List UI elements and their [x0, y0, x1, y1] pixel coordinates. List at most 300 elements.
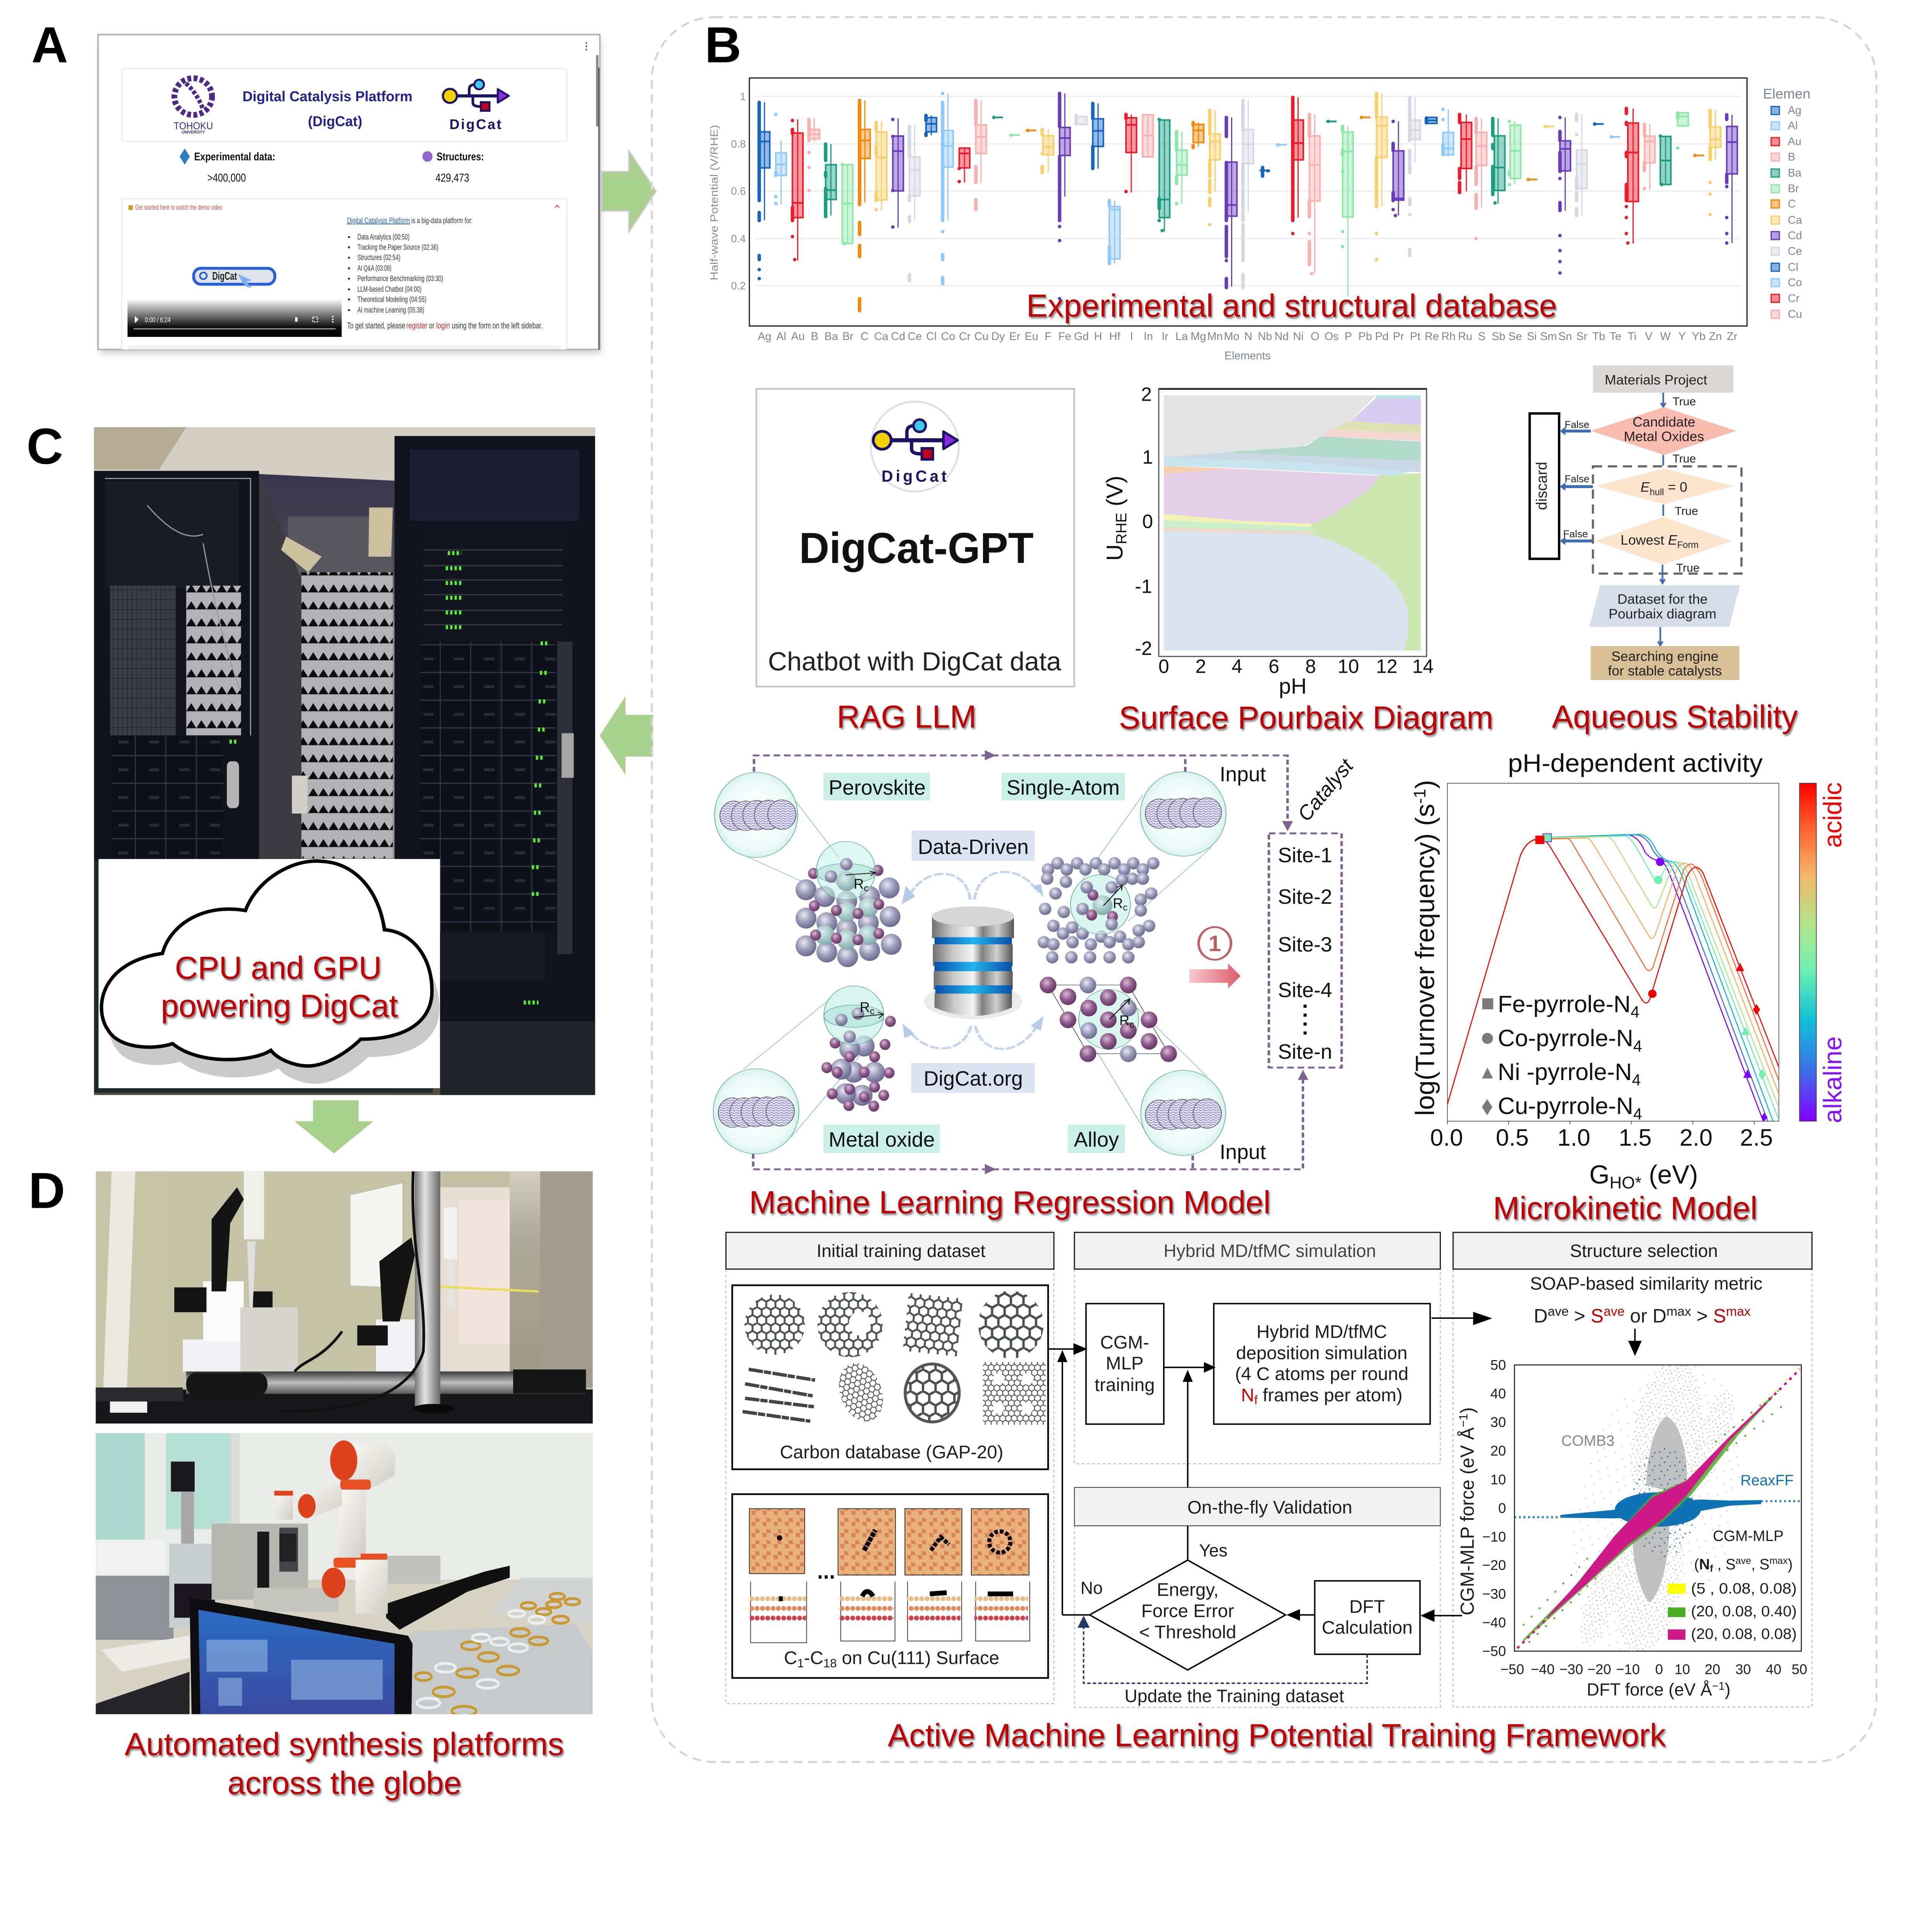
axes text: )	[1410, 780, 1440, 789]
x axis labels: Cu	[975, 330, 988, 343]
axes text	[1410, 780, 1847, 1192]
statistics: structures: Structures:	[437, 151, 484, 163]
x axis labels: Co	[941, 330, 955, 343]
chart: parity scatter plot	[1457, 1344, 1807, 1699]
legend: Cr	[1788, 292, 1800, 304]
axis labels: 2	[1141, 383, 1152, 405]
x axis labels: Zr	[1727, 330, 1737, 343]
x axis labels: Gd	[1074, 330, 1089, 343]
parallelogram: dataset: Dataset for the	[1617, 592, 1708, 607]
icon: DigCat logo badge: DigCat	[881, 467, 947, 485]
axes text: acidic	[1819, 782, 1847, 848]
labels: Site-4	[1278, 979, 1332, 1002]
flowchart: aqueous stability	[1530, 366, 1742, 680]
flowchart: aqueous stability: True	[1675, 505, 1698, 518]
legend: Ca	[1788, 214, 1802, 226]
legend: Co	[1788, 277, 1802, 289]
workflow labels: Update the Training dataset	[1124, 1686, 1344, 1706]
labels: Catalyst	[1293, 754, 1358, 826]
x axis labels: Rh	[1441, 330, 1456, 343]
feature list text: login	[436, 321, 450, 330]
annotations and legend: ave	[1736, 1556, 1751, 1566]
axis labels	[1102, 383, 1434, 698]
x axis labels: Ce	[908, 330, 922, 343]
box: DFT calculation: Calculation	[1322, 1617, 1413, 1638]
x axis labels: Au	[791, 330, 805, 343]
chart: surface Pourbaix diagram	[1102, 383, 1434, 698]
tick labels: CGM-MLP force (eV Å	[1457, 1427, 1478, 1616]
text: SOAP similarity metric: max	[1726, 1304, 1751, 1319]
Rc labels: R	[854, 876, 864, 892]
x axis labels: I	[1130, 330, 1133, 343]
text: SOAP similarity metric: >	[1569, 1305, 1591, 1327]
tick labels: )	[1725, 1680, 1731, 1699]
annotations and legend: , S	[1713, 1556, 1736, 1573]
feature list text: Digital Catalysis Platform	[347, 216, 410, 225]
statistics: experimental data	[180, 148, 275, 184]
axis labels: -2	[1135, 638, 1152, 659]
callout cloud: powering DigCat	[161, 988, 398, 1024]
tick labels: −1	[1456, 1413, 1470, 1427]
header: structure selection: Structure selection	[1570, 1241, 1718, 1261]
green and magenta diagonal	[1517, 1365, 1801, 1648]
arrow: from C to D	[294, 1100, 373, 1153]
legend text: 4	[1633, 1037, 1642, 1055]
axis labels: 6	[1269, 655, 1279, 677]
axis labels: 10	[1338, 655, 1359, 677]
Rc labels: c	[864, 883, 869, 893]
flowchart: aqueous stability: True	[1672, 452, 1696, 465]
labels: Data-Driven	[918, 835, 1029, 859]
x axis labels	[758, 330, 1737, 362]
box: C1-C18 on Cu(111): C	[784, 1648, 797, 1668]
tick labels: −30	[1560, 1662, 1583, 1677]
feature list text: using the form on the left sidebar.	[452, 321, 543, 330]
photo: servers	[94, 427, 595, 1095]
demo video card: DigCat	[212, 270, 237, 282]
icon: Tohoku University crest: TOHOKU	[173, 120, 213, 131]
tick labels	[1457, 1357, 1807, 1699]
panel label C: C	[27, 418, 63, 474]
tick labels: −20	[1587, 1662, 1611, 1677]
lens connector lines	[743, 779, 1211, 1137]
legend text: 4	[1633, 1105, 1642, 1123]
tick labels: −20	[1482, 1557, 1506, 1573]
legend: Ba	[1788, 167, 1801, 179]
text: SOAP similarity metric: >	[1691, 1305, 1713, 1327]
diamond: lowest EForm: Form	[1677, 540, 1699, 550]
caption: Automated synthesis platforms	[124, 1726, 564, 1762]
tick labels: 0	[1498, 1500, 1506, 1516]
feature list text: is a big-data platform for:	[411, 216, 473, 225]
lens: catalyst fingerprints	[713, 772, 1226, 1155]
x axis labels: Sr	[1576, 330, 1588, 343]
axes text: log(Turnover frequency) (s	[1410, 804, 1440, 1116]
tick labels: DFT force (eV Å	[1587, 1680, 1712, 1699]
Rc labels: R	[860, 999, 870, 1015]
x axis labels: In	[1144, 330, 1153, 343]
axis labels: RHE	[1113, 513, 1130, 544]
tick labels: 0	[1655, 1662, 1663, 1677]
tick labels: −10	[1616, 1662, 1640, 1677]
callout cloud	[99, 859, 440, 1088]
box: C1-C18 on Cu(111): -C	[804, 1648, 823, 1668]
legend text: 4	[1631, 1003, 1639, 1021]
y axis labels: 0.4	[731, 233, 746, 245]
Rc labels: c	[1129, 1019, 1134, 1030]
box: searching engine	[1591, 646, 1739, 680]
tick labels: −50	[1482, 1643, 1506, 1659]
x axis labels: Fe	[1058, 330, 1071, 343]
x axis labels: Hf	[1109, 330, 1121, 343]
curves	[1447, 834, 1779, 1121]
demo video card: 0:00 / 6:24	[145, 316, 170, 324]
box: Hybrid MD/tfMC deposition: N	[1241, 1385, 1254, 1405]
tick labels: 10	[1490, 1471, 1506, 1487]
Rc labels: c	[1123, 902, 1128, 913]
x axis labels: Ni	[1293, 330, 1304, 343]
feature list text: or	[429, 321, 435, 330]
y axis labels: 0.2	[731, 280, 746, 292]
text: SOAP similarity metric: max	[1667, 1304, 1691, 1319]
box: C1-C18 on Cu(111): 1	[797, 1656, 804, 1670]
statistics: experimental data: >400,000	[207, 172, 246, 184]
annotations and legend: (5 , 0.08, 0.08)	[1691, 1580, 1797, 1597]
structure: perovskite	[796, 842, 901, 967]
box: C1-C18 on Cu(111): on Cu(111) Surface	[837, 1648, 999, 1668]
diamond: candidate metal oxides: Metal Oxides	[1624, 429, 1704, 444]
box: DFT calculation: DFT	[1349, 1597, 1385, 1617]
heading: Surface Pourbaix Diagram: Surface Pourbaix Diagram	[1119, 700, 1493, 736]
structure: alloy	[1040, 977, 1177, 1062]
feature list text: Performance Benchmarking (03:30)	[357, 275, 443, 283]
axes text: 1.0	[1558, 1124, 1590, 1151]
box: discard: discard	[1534, 462, 1550, 510]
photo: robot arm with catalyst plates	[96, 1433, 593, 1716]
box: discard	[1530, 413, 1559, 559]
feature list text: To get started, please	[347, 321, 405, 330]
panel: machine learning regression model: 1	[1209, 931, 1221, 956]
y axis labels	[708, 90, 746, 292]
chart title: pH-dependent activity	[1508, 749, 1763, 778]
false arrows: False	[1563, 528, 1588, 540]
box: Hybrid MD/tfMC deposition: deposition simulation	[1236, 1343, 1407, 1364]
feature list text: Data Analytics (00:50)	[357, 233, 410, 242]
panel B dashed outline	[652, 17, 1876, 1762]
statistics: experimental data: Experimental data:	[194, 151, 275, 163]
axes text: 2.5	[1740, 1124, 1773, 1151]
icon: DigCat logo: DigCat	[449, 116, 502, 132]
arrow: from B to C	[600, 696, 653, 775]
green LEDs	[230, 553, 548, 1003]
annotations and legend: max	[1769, 1556, 1788, 1566]
x axis labels: Mg	[1190, 330, 1206, 343]
legend: Au	[1788, 136, 1801, 148]
heading: RAG LLM: RAG LLM	[837, 699, 976, 735]
x axis labels: P	[1345, 330, 1352, 343]
x axis labels: Se	[1509, 330, 1522, 343]
header: on-the-fly validation	[1075, 1487, 1440, 1526]
legend: C	[1788, 198, 1796, 210]
chart: half-wave potential box plot	[708, 78, 1821, 362]
feature list text: Tracking the Paper Source (02:36)	[357, 243, 438, 252]
x axis labels: V	[1645, 330, 1653, 343]
axes text: 1.5	[1619, 1124, 1651, 1151]
header: initial training dataset	[726, 1232, 1054, 1269]
tick labels: −40	[1482, 1614, 1506, 1630]
Rc labels	[854, 876, 1134, 1030]
labels: Site-2	[1278, 885, 1332, 908]
x axis labels: Y	[1679, 330, 1686, 343]
tick labels: −50	[1500, 1662, 1524, 1677]
text: SOAP similarity metric: D	[1534, 1305, 1548, 1327]
box: DFT calculation	[1315, 1581, 1420, 1654]
heading: DigCat-GPT: DigCat-GPT	[799, 524, 1034, 572]
feature list text: Theoretical Modeling (04:55)	[357, 295, 427, 304]
legend: Elements	[1763, 86, 1821, 102]
box: CGM-MLP training: CGM-	[1100, 1332, 1149, 1353]
legend text: Co-pyrrole-N	[1498, 1025, 1633, 1051]
x axis labels: Al	[776, 330, 786, 343]
axes text: 2.0	[1680, 1124, 1713, 1151]
callout cloud: CPU and GPU	[175, 950, 382, 986]
gray COMB3 cloud	[1544, 1344, 1772, 1672]
x axis labels: W	[1660, 330, 1671, 343]
legend: Cd	[1788, 230, 1802, 242]
x axis labels: Ir	[1162, 330, 1168, 343]
x axis labels: Ag	[758, 330, 771, 343]
text: SOAP similarity metric: ave	[1548, 1304, 1569, 1319]
caption: across the globe	[228, 1765, 461, 1801]
statistics: structures	[422, 151, 484, 184]
tick labels: )	[1457, 1407, 1478, 1413]
axis labels: 4	[1231, 655, 1242, 677]
axes text: (eV)	[1641, 1160, 1698, 1189]
labels: DigCat.org	[923, 1067, 1023, 1090]
x axis labels: Pd	[1375, 330, 1389, 343]
x axis labels: Ca	[874, 330, 888, 343]
x axis labels: Nb	[1258, 330, 1272, 343]
box: carbon database	[732, 1285, 1048, 1469]
tick labels: 50	[1792, 1662, 1807, 1677]
tick labels: −40	[1531, 1662, 1554, 1677]
text: SOAP similarity metric: ave	[1604, 1304, 1625, 1319]
x axis labels: Eu	[1025, 330, 1038, 343]
feature list text: register	[406, 321, 428, 330]
y axis labels: Half-wave Potential (V/RHE)	[708, 125, 720, 281]
box: carbon database: Carbon database (GAP-20)	[780, 1442, 1003, 1463]
x axis labels: Cr	[959, 330, 971, 343]
axis labels: -1	[1135, 575, 1152, 597]
x axis labels: Pb	[1359, 330, 1372, 343]
x axis labels: Si	[1527, 330, 1537, 343]
box: Hybrid MD/tfMC deposition	[1214, 1304, 1430, 1424]
x axis labels: Te	[1609, 330, 1621, 343]
axis labels: (V)	[1102, 476, 1128, 513]
legend text: Ni -pyrrole-N	[1498, 1059, 1632, 1085]
structure: single atom	[1037, 857, 1160, 963]
diamond: candidate metal oxides	[1591, 407, 1736, 455]
title: Digital Catalysis Platform	[243, 88, 413, 104]
labels: Input	[1219, 1140, 1266, 1163]
panel C: server rack photo with callout	[94, 427, 595, 1095]
annotations and legend: COMB3	[1561, 1432, 1614, 1449]
diamond: error threshold: Force Error	[1141, 1601, 1234, 1621]
text: SOAP similarity metric: or D	[1625, 1305, 1667, 1327]
x axis labels: Mn	[1207, 330, 1223, 343]
x axis labels: Sm	[1540, 330, 1557, 343]
legend: Cl	[1788, 261, 1798, 274]
workflow arrows	[1049, 1312, 1642, 1683]
tick labels: −10	[1482, 1529, 1506, 1544]
annotations and legend: , S	[1751, 1556, 1769, 1573]
x axis labels: Zn	[1709, 330, 1722, 343]
icon: Tohoku University crest: UNIVERSITY	[182, 130, 205, 135]
heading: Machine Learning Regression Model: Machine Learning Regression Model	[749, 1185, 1270, 1220]
x axis labels: Elements	[1225, 350, 1271, 362]
tick labels: 30	[1735, 1662, 1751, 1677]
legend text	[1498, 991, 1642, 1123]
title	[243, 88, 413, 129]
title: (DigCat)	[308, 113, 362, 129]
axes text: 0.5	[1496, 1124, 1529, 1151]
feature list text	[347, 216, 543, 330]
parallelogram: dataset	[1589, 585, 1740, 627]
legend: Al	[1788, 119, 1798, 132]
tick labels: −1	[1712, 1680, 1725, 1692]
x axis labels: Ba	[825, 330, 838, 343]
text: SOAP similarity metric: S	[1713, 1305, 1726, 1327]
dashed box: filters	[1593, 466, 1742, 573]
axis labels: 0	[1142, 510, 1153, 532]
Rc labels: c	[870, 1006, 874, 1017]
panel: active ML potential workflow	[726, 1232, 1812, 1708]
caption: Chatbot with DigCat data	[768, 647, 1061, 676]
x axis labels: Nd	[1274, 330, 1289, 343]
false arrows: False	[1565, 418, 1589, 430]
labels	[828, 754, 1358, 1163]
labels: Site-3	[1278, 933, 1332, 956]
x axis labels: Cl	[926, 330, 937, 343]
diamond: Ehull = 0: E	[1641, 480, 1650, 495]
axis labels: U	[1102, 544, 1128, 561]
annotations and legend: (20, 0.08, 0.40)	[1691, 1603, 1797, 1620]
panel: DigCat-GPT card	[757, 389, 1074, 687]
panel A: DigCat web platform screenshot	[98, 34, 601, 354]
box: Materials Project: Materials Project	[1605, 372, 1707, 388]
box: searching engine: Searching engine	[1611, 649, 1718, 664]
x axis labels: N	[1244, 330, 1252, 343]
x axis labels: S	[1478, 330, 1486, 343]
axes text: -1	[1410, 789, 1429, 804]
arrow: step 1	[1189, 927, 1241, 988]
panel A: DigCat web platform screenshot: ⋮	[582, 41, 591, 52]
axes text: G	[1589, 1160, 1610, 1189]
labels: Single-Atom	[1007, 776, 1120, 799]
y axis labels: 0.8	[731, 138, 746, 150]
text: SOAP similarity metric: S	[1591, 1305, 1604, 1327]
x axis labels: Ti	[1628, 330, 1636, 343]
y axis labels: 0.6	[731, 185, 746, 197]
heading: Aqueous Stability: Aqueous Stability	[1552, 699, 1798, 735]
annotations and legend: )	[1788, 1556, 1793, 1573]
icon: DigCat logo	[443, 80, 509, 132]
heading: Active Machine Learning Potential Training Framework: Active Machine Learning Potential Training Framework	[888, 1718, 1666, 1753]
heading: Experimental and structural database: Experimental and structural database	[1026, 288, 1557, 323]
header: structure selection	[1453, 1232, 1812, 1269]
false arrows	[1560, 419, 1593, 545]
labels: Perovskite	[829, 776, 925, 799]
feature list text: Structures (02:54)	[357, 253, 400, 262]
demo video card: Get started here to watch the demo video	[135, 203, 223, 211]
diamond: candidate metal oxides: Candidate	[1633, 414, 1695, 430]
tick labels: 10	[1675, 1662, 1690, 1677]
annotations and legend: CGM-MLP	[1713, 1528, 1784, 1544]
panel label D: D	[29, 1162, 65, 1219]
axes text: HO*	[1610, 1173, 1641, 1192]
caption	[124, 1726, 564, 1801]
legend: Ce	[1788, 245, 1802, 257]
axis labels: 8	[1305, 655, 1316, 677]
flowchart: aqueous stability: True	[1672, 395, 1696, 408]
workflow labels: No	[1080, 1578, 1103, 1598]
x axis labels: Br	[842, 330, 854, 343]
flowchart: aqueous stability: True	[1676, 561, 1699, 574]
box: Hybrid MD/tfMC deposition: frames per atom)	[1258, 1385, 1403, 1405]
Rc labels: R	[1119, 1012, 1129, 1028]
photo: robot arms with pipettes	[96, 1171, 593, 1423]
box: searching engine: for stable catalysts	[1608, 663, 1722, 679]
markers	[1482, 783, 1816, 1121]
box: Materials Project	[1593, 366, 1733, 393]
box: Hybrid MD/tfMC deposition: Hybrid MD/tfMC	[1257, 1322, 1387, 1342]
workflow labels	[1080, 1541, 1344, 1706]
x axis labels: Sn	[1558, 330, 1572, 343]
tick labels: 20	[1705, 1662, 1720, 1677]
legend text: Cu-pyrrole-N	[1498, 1093, 1633, 1119]
legend text: 4	[1632, 1071, 1641, 1089]
x axis labels: Cd	[891, 330, 905, 343]
text: SOAP similarity metric: SOAP-based similarity metric	[1530, 1274, 1762, 1294]
x axis labels: Tb	[1592, 330, 1605, 343]
header: initial training dataset: Initial training dataset	[816, 1241, 986, 1261]
diamond: Ehull = 0	[1595, 468, 1734, 504]
labels: Input	[1219, 763, 1266, 786]
axes text: alkaline	[1819, 1036, 1847, 1123]
statistics: structures: 429,473	[435, 172, 469, 184]
header card	[122, 68, 567, 141]
axes text: 0.0	[1430, 1124, 1463, 1151]
header: on-the-fly validation: On-the-fly Validation	[1187, 1497, 1352, 1518]
x axis labels: C	[861, 330, 869, 343]
tick labels: 40	[1490, 1386, 1506, 1401]
icon: Tohoku University crest	[173, 78, 213, 135]
Rc labels: R	[1113, 895, 1123, 911]
x axis labels: Re	[1425, 330, 1439, 343]
labels: Metal oxide	[828, 1128, 935, 1151]
box: Hybrid MD/tfMC deposition: (4 C atoms per round	[1235, 1364, 1408, 1384]
x axis labels: Pr	[1393, 330, 1404, 343]
annotations and legend: f	[1710, 1563, 1713, 1574]
legend: Cu	[1788, 308, 1802, 321]
labels: Site-n	[1278, 1040, 1332, 1063]
feature list text: AI machine Learning (05:38)	[357, 306, 424, 315]
x axis labels: Os	[1325, 330, 1339, 343]
annotations and legend	[1561, 1432, 1797, 1642]
axis labels: 2	[1196, 655, 1206, 677]
dashed input lines	[753, 755, 1342, 1169]
diamond: lowest EForm: Lowest E	[1621, 532, 1677, 548]
